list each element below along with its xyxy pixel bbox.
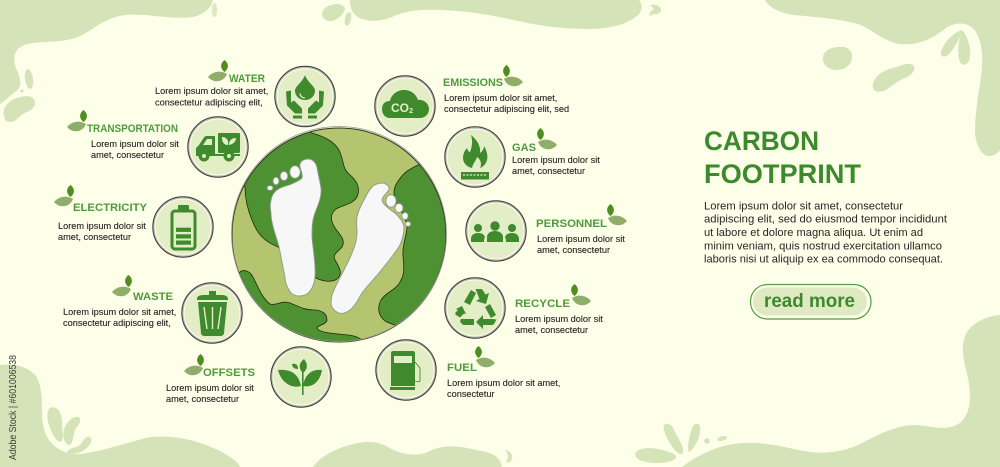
people icon (466, 201, 526, 261)
emissions leaves (503, 65, 523, 86)
globe with footprints (231, 126, 447, 342)
water text: Lorem ipsum dolor sit amet, (155, 86, 268, 96)
water leaves (208, 60, 228, 81)
read more button (750, 284, 871, 319)
description: minim veniam, quis nostrud exercitation ullamco (704, 240, 942, 252)
trash bin icon (182, 283, 242, 343)
title (704, 126, 861, 189)
waste text: consectetur adipiscing elit, (63, 318, 171, 328)
item: waste (63, 275, 242, 343)
item: emissions (375, 65, 569, 136)
personnel heading: PERSONNEL (536, 218, 607, 230)
emissions text: Lorem ipsum dolor sit amet, (444, 93, 557, 103)
item: gas (445, 127, 600, 187)
electricity text: Lorem ipsum dolor sit (58, 221, 146, 231)
offsets text: amet, consectetur (166, 394, 239, 404)
left footprint (267, 159, 321, 296)
item: recycle (445, 278, 603, 338)
co2 cloud icon: 2 (409, 106, 413, 115)
item: fuel (376, 340, 560, 400)
waste leaves (112, 275, 132, 296)
gas text: amet, consectetur (512, 166, 585, 176)
water text: consectetur adipiscing elit, (155, 98, 263, 108)
offsets heading: OFFSETS (203, 367, 255, 379)
fuel pump icon (376, 340, 436, 400)
transportation heading: TRANSPORTATION (87, 123, 178, 135)
emissions text: consectetur adipiscing elit, sed (444, 104, 569, 114)
waste heading: WASTE (133, 291, 173, 303)
personnel text: Lorem ipsum dolor sit (537, 234, 625, 244)
item: transportation (67, 110, 248, 177)
personnel leaves (607, 204, 627, 225)
fuel heading: FUEL (447, 362, 477, 374)
gas leaves (537, 128, 557, 149)
item: water (155, 60, 335, 127)
recycle leaves (571, 284, 591, 305)
recycle icon (445, 278, 505, 338)
water heading: WATER (229, 73, 265, 85)
offsets text: Lorem ipsum dolor sit (166, 383, 254, 393)
transportation leaves (67, 110, 87, 131)
right footprint (331, 183, 411, 313)
electricity leaves (54, 185, 74, 206)
title: CARBON (704, 126, 819, 156)
recycle text: amet, consectetur (515, 325, 588, 335)
fuel text: Lorem ipsum dolor sit amet, (447, 378, 560, 388)
electricity text: amet, consectetur (58, 232, 131, 242)
transportation text: amet, consectetur (91, 150, 164, 160)
gas heading: GAS (512, 142, 536, 154)
item: offsets (166, 347, 331, 407)
offsets leaves (184, 354, 204, 375)
truck icon (188, 117, 248, 177)
item: electricity (54, 185, 213, 257)
item: personnel (466, 201, 627, 261)
co2 cloud icon: CO (391, 101, 409, 115)
transportation text: Lorem ipsum dolor sit (91, 139, 179, 149)
waste text: Lorem ipsum dolor sit amet, (63, 307, 176, 317)
description: adipiscing elit, sed do eiusmod tempor incididunt (704, 214, 948, 226)
fuel text: consectetur (447, 389, 494, 399)
gas text: Lorem ipsum dolor sit (512, 155, 600, 165)
gas flame icon (445, 127, 505, 187)
stock id text: Adobe Stock | #601006538 (8, 355, 19, 460)
description: ut labore et dolore magna aliqua. Ut enim ad (704, 227, 923, 239)
fuel leaves (475, 346, 495, 367)
description: Lorem ipsum dolor sit amet, consectetur (704, 200, 903, 212)
battery icon (153, 197, 213, 257)
recycle text: Lorem ipsum dolor sit (515, 314, 603, 324)
recycle heading: RECYCLE (515, 298, 570, 310)
emissions heading: EMISSIONS (443, 77, 503, 89)
plant icon (271, 347, 331, 407)
description: laboris nisi ut aliquip ex ea commodo consequat. (704, 254, 943, 266)
read more button: read more (764, 291, 855, 312)
personnel text: amet, consectetur (537, 245, 610, 255)
electricity heading: ELECTRICITY (73, 202, 148, 214)
water icon (275, 66, 335, 127)
description (704, 200, 948, 266)
co2 cloud icon (375, 76, 435, 136)
title: FOOTPRINT (704, 159, 861, 189)
